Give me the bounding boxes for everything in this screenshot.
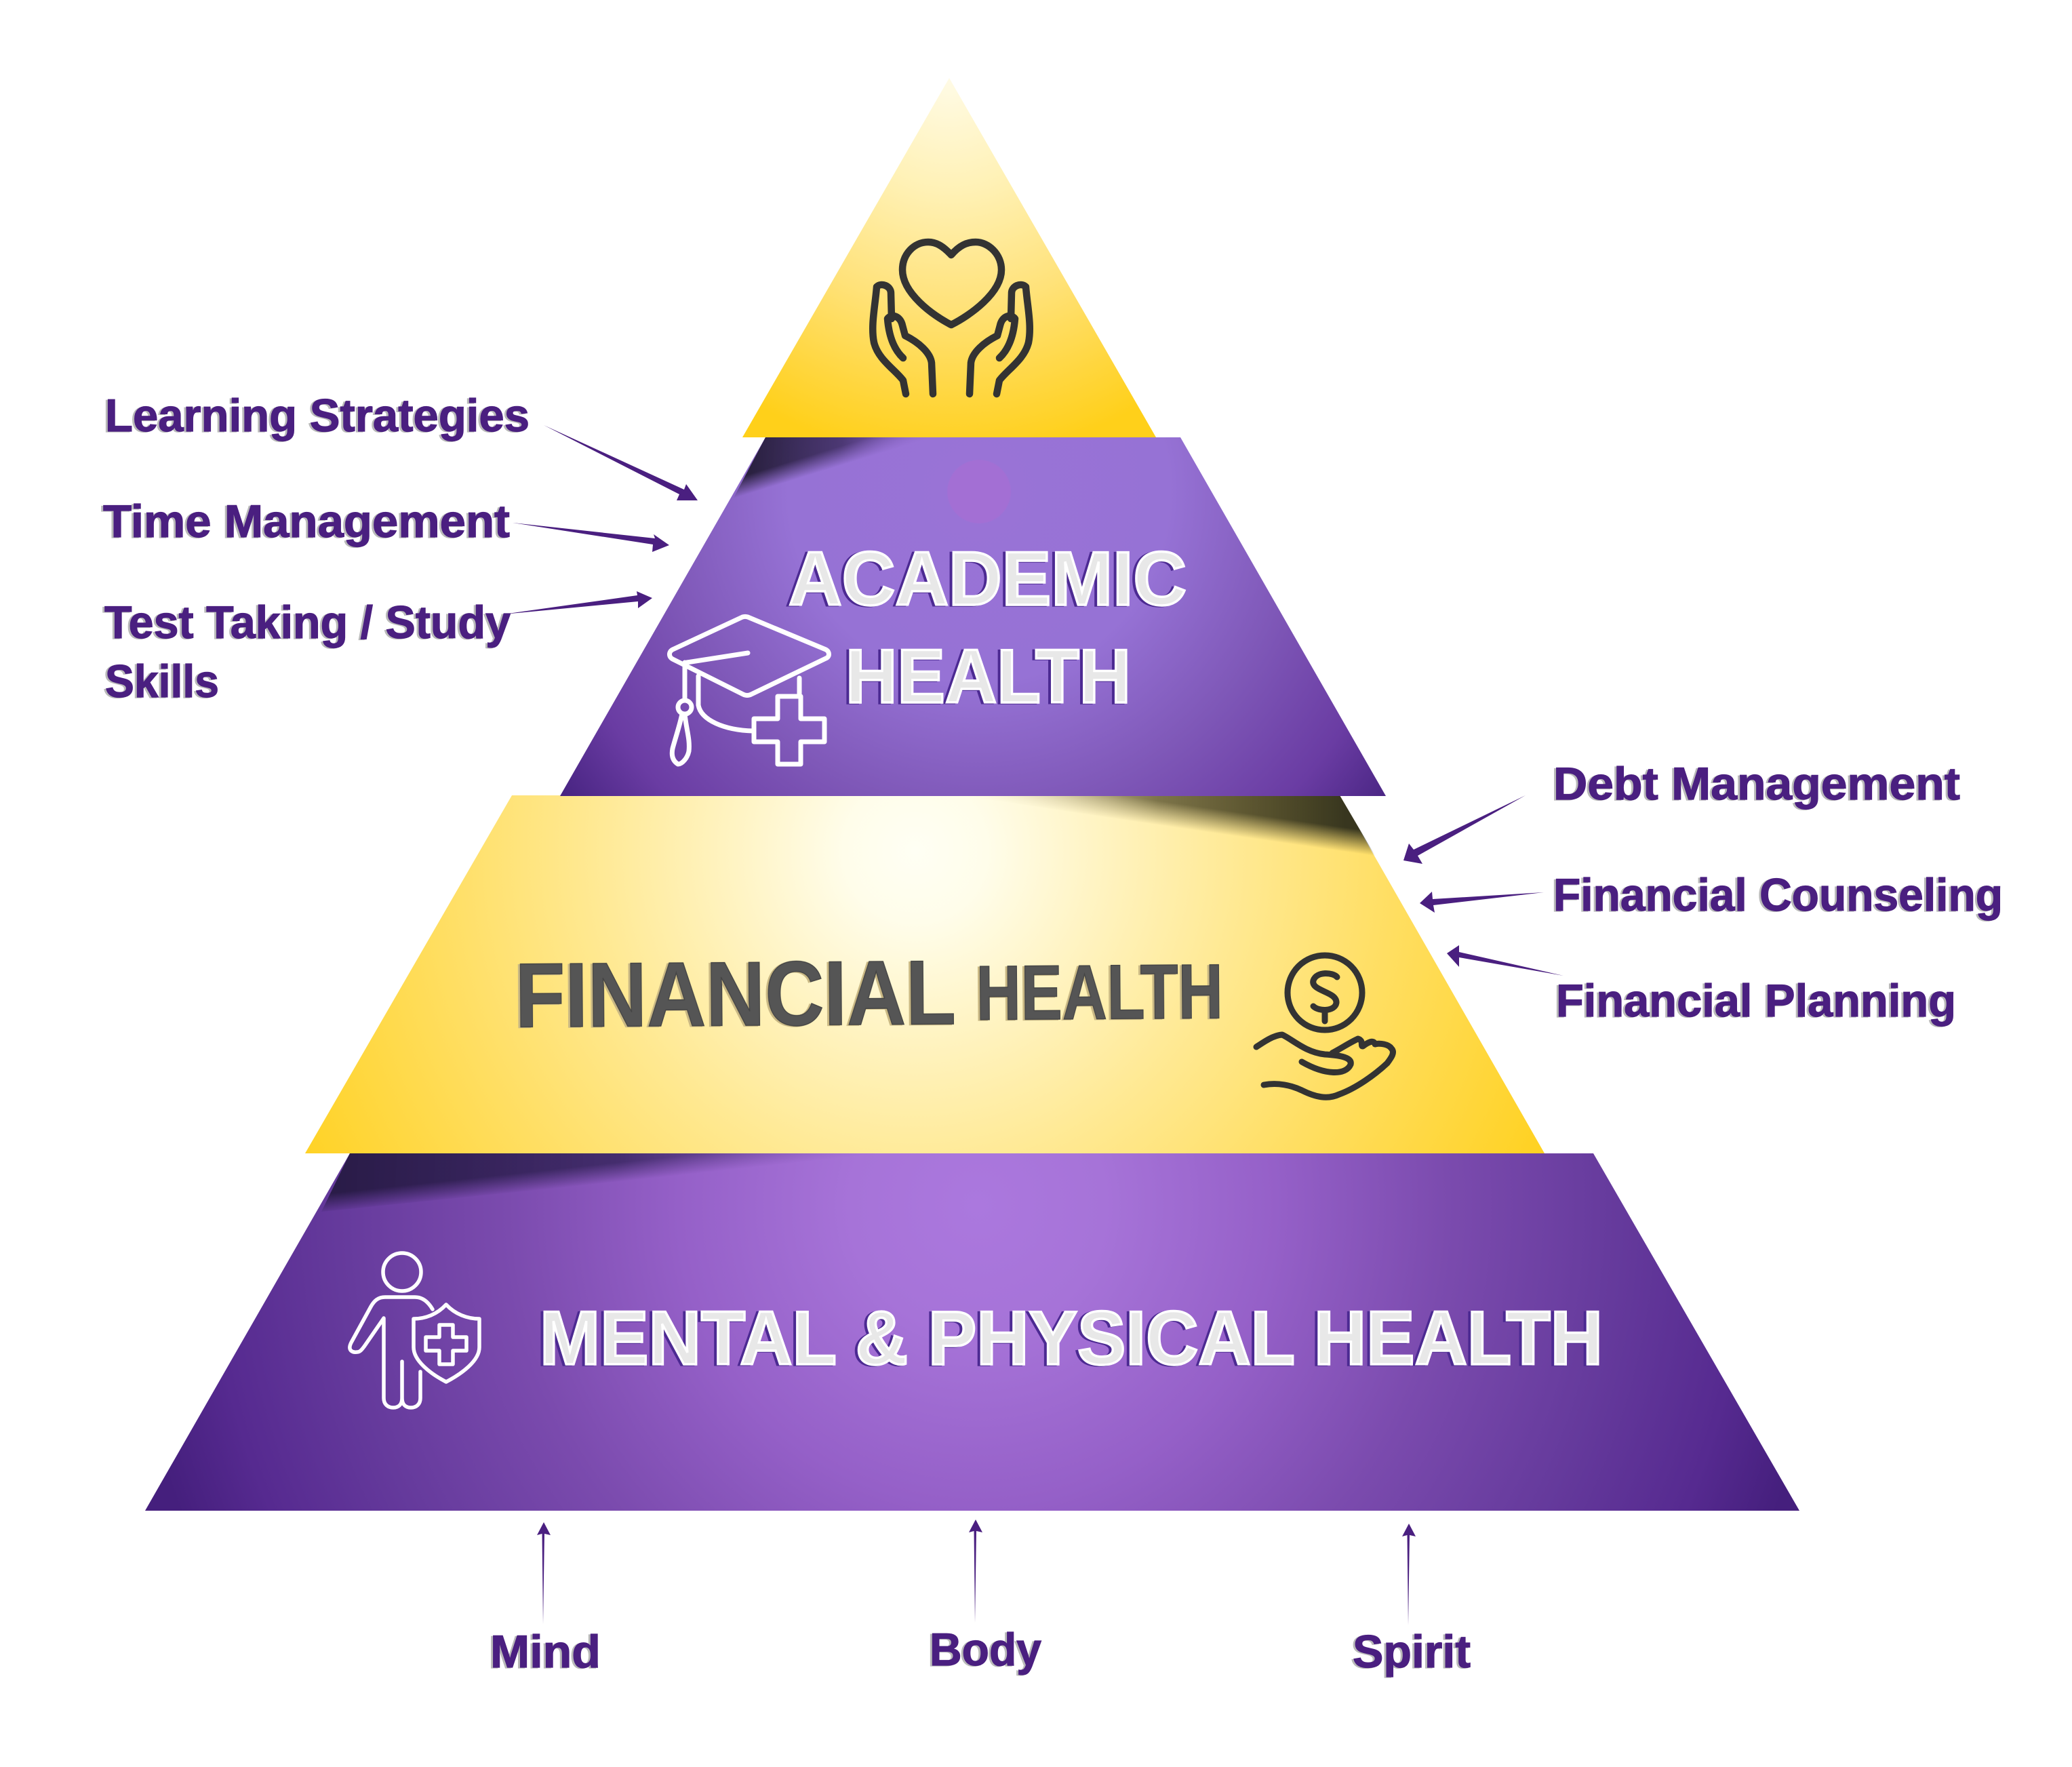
label: test taking and study skills: Test Taking / Study — [104, 597, 511, 648]
label: spirit: Spirit — [1353, 1626, 1471, 1677]
arrow: time management — [513, 523, 669, 552]
arrow: financial planning — [1447, 945, 1563, 976]
panel: financial health tier — [305, 795, 1545, 1153]
icon: hand holding coin — [1256, 955, 1393, 1097]
label: mind: Mind — [490, 1626, 601, 1677]
panel: academic health tier — [560, 437, 1386, 796]
heading: academic health: HEALTH — [845, 634, 1131, 719]
arrow: spirit — [1402, 1524, 1416, 1625]
heading: financial health — [515, 939, 1223, 1047]
arrow: financial counseling — [1420, 892, 1544, 913]
icon: graduation cap with plus — [670, 616, 829, 764]
callouts: academic health skills — [103, 390, 698, 707]
arrow: body — [969, 1520, 982, 1623]
label: test taking and study skills: Skills — [105, 656, 219, 707]
label: debt management: Debt Management — [1553, 758, 1960, 810]
label: learning strategies: Learning Strategies — [105, 390, 530, 441]
arrow: debt management — [1403, 795, 1526, 864]
icon: heart held by hands — [873, 242, 1030, 394]
arrow: mind — [537, 1522, 551, 1624]
label: financial planning: Financial Planning — [1556, 975, 1956, 1027]
callouts: mind, body, spirit — [490, 1520, 1471, 1677]
arrow: learning strategies — [544, 425, 698, 500]
panel: apex tier, wellbeing — [742, 78, 1156, 437]
arrow: test taking — [503, 591, 652, 614]
icon: person with shield — [350, 1253, 479, 1408]
label: test taking and study skills — [104, 597, 511, 707]
heading: financial health: HEALTH — [976, 949, 1223, 1037]
label: body: Body — [930, 1624, 1041, 1675]
label: time management: Time Management — [103, 496, 510, 547]
heading: mental and physical health: MENTAL & PHYSICAL HEALTH — [540, 1296, 1603, 1381]
label: financial counseling: Financial Counseling — [1553, 869, 2003, 921]
callouts: financial health skills — [1403, 758, 2003, 1027]
heading: academic health — [789, 536, 1187, 719]
heading: financial health: FINANCIAL — [515, 941, 956, 1047]
heading: academic health: ACADEMIC — [789, 536, 1187, 621]
panel: foundation tier, mental and physical health — [145, 1153, 1799, 1511]
